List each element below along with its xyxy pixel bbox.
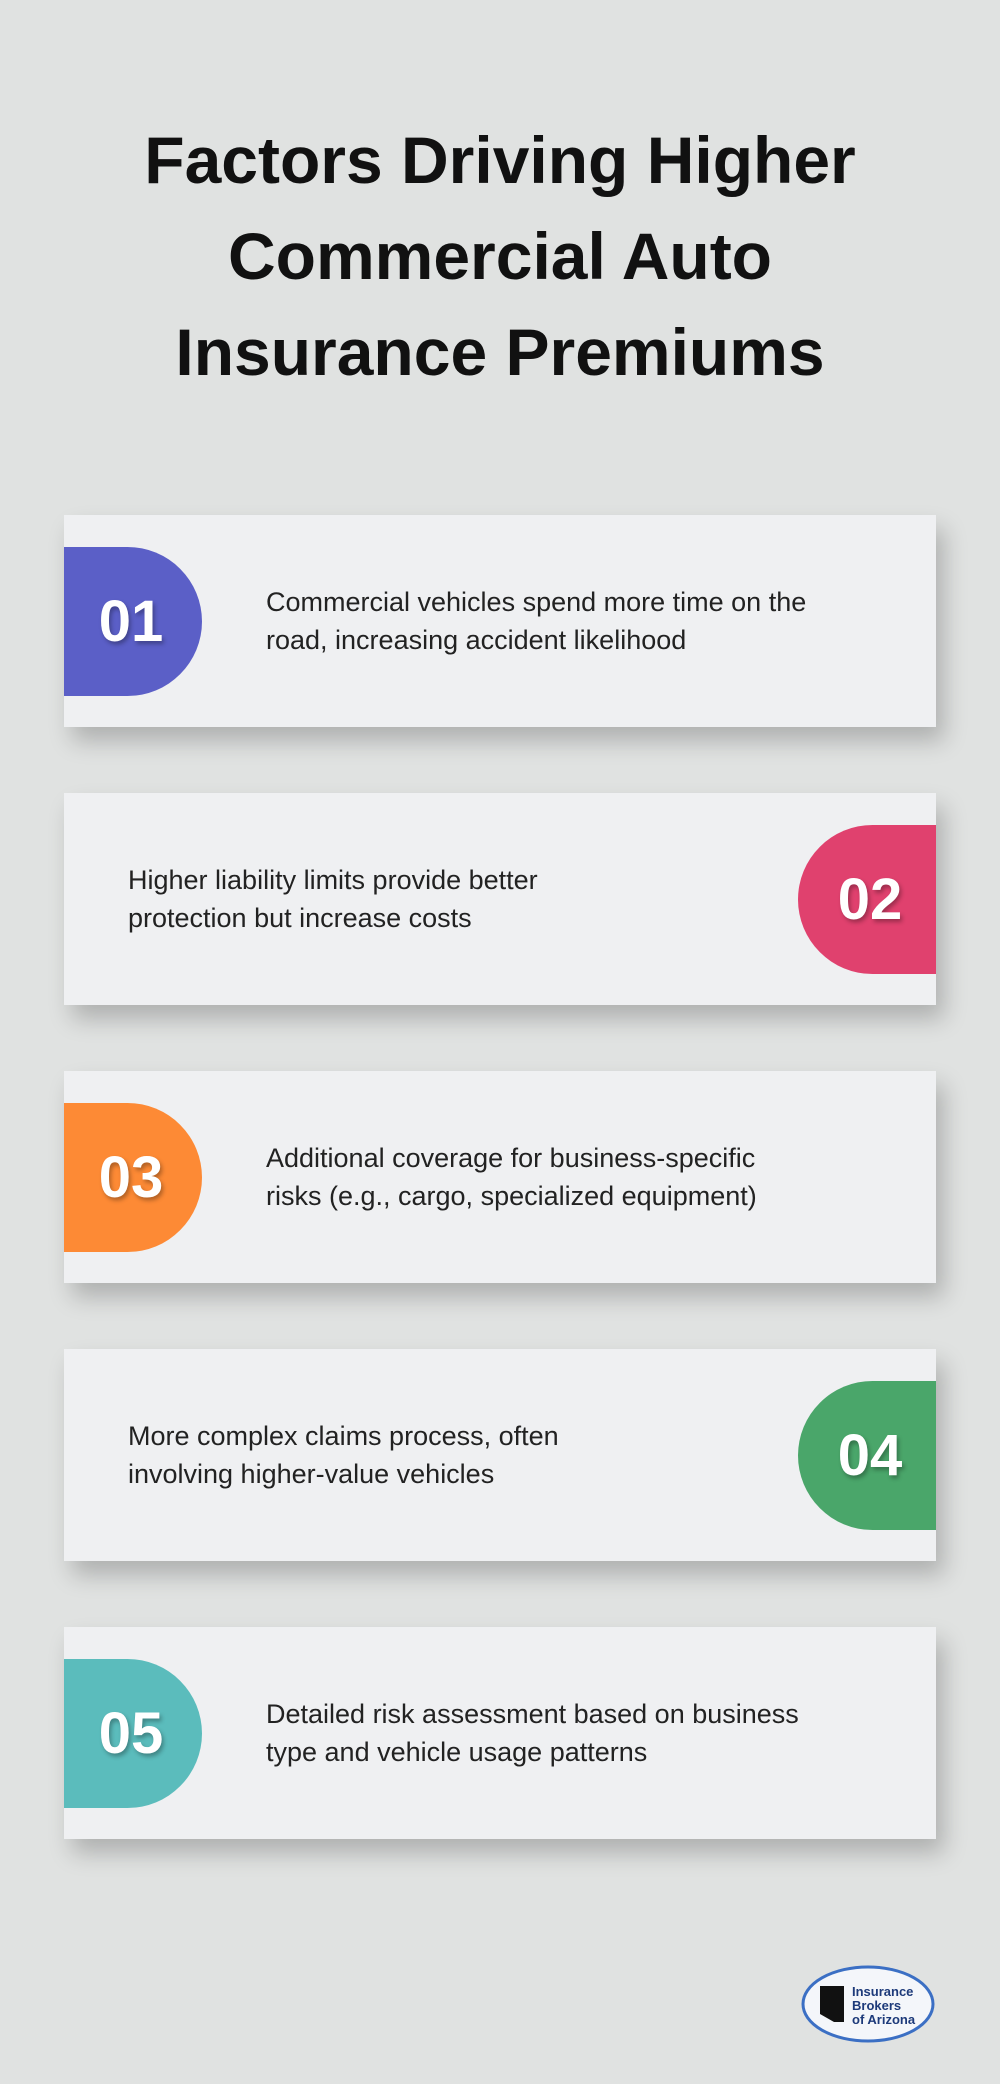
text 01: road, increasing accident likelihood [266,625,686,655]
text 02 [128,865,538,933]
text 05 [266,1699,799,1767]
logo [802,1966,934,2042]
panel: factor 03 [64,1071,936,1283]
text 02: protection but increase costs [128,903,472,933]
badge 05 [64,1659,202,1808]
title: Factors Driving Higher [144,123,856,197]
logo: Insurance [852,1984,913,1999]
text 05: Detailed risk assessment based on business [266,1699,799,1729]
badge 02: 02 [838,867,902,932]
text 04 [128,1421,559,1489]
badge 04 [798,1381,936,1530]
logo: of Arizona [852,2012,916,2027]
panel: factor 01 [64,515,936,727]
badge 01 [64,547,202,696]
badge 03: 03 [99,1145,163,1210]
panel: factor 04 [64,1349,936,1561]
text 02: Higher liability limits provide better [128,865,538,895]
panel: factor 05 [64,1627,936,1839]
title: Commercial Auto [228,219,772,293]
logo: Brokers [852,1998,901,2013]
text 01: Commercial vehicles spend more time on the [266,587,806,617]
badge 01: 01 [99,589,163,654]
badge 04: 04 [838,1423,902,1488]
title: Insurance Premiums [175,315,825,389]
text 05: type and vehicle usage patterns [266,1737,647,1767]
badge 02 [798,825,936,974]
badge 03 [64,1103,202,1252]
title [144,123,856,389]
text 01 [266,587,806,655]
text 03: risks (e.g., cargo, specialized equipment) [266,1181,757,1211]
text 03 [266,1143,757,1211]
text 04: More complex claims process, often [128,1421,559,1451]
badge 05: 05 [99,1701,163,1766]
text 04: involving higher-value vehicles [128,1459,494,1489]
panel: factor 02 [64,793,936,1005]
text 03: Additional coverage for business-specific [266,1143,755,1173]
